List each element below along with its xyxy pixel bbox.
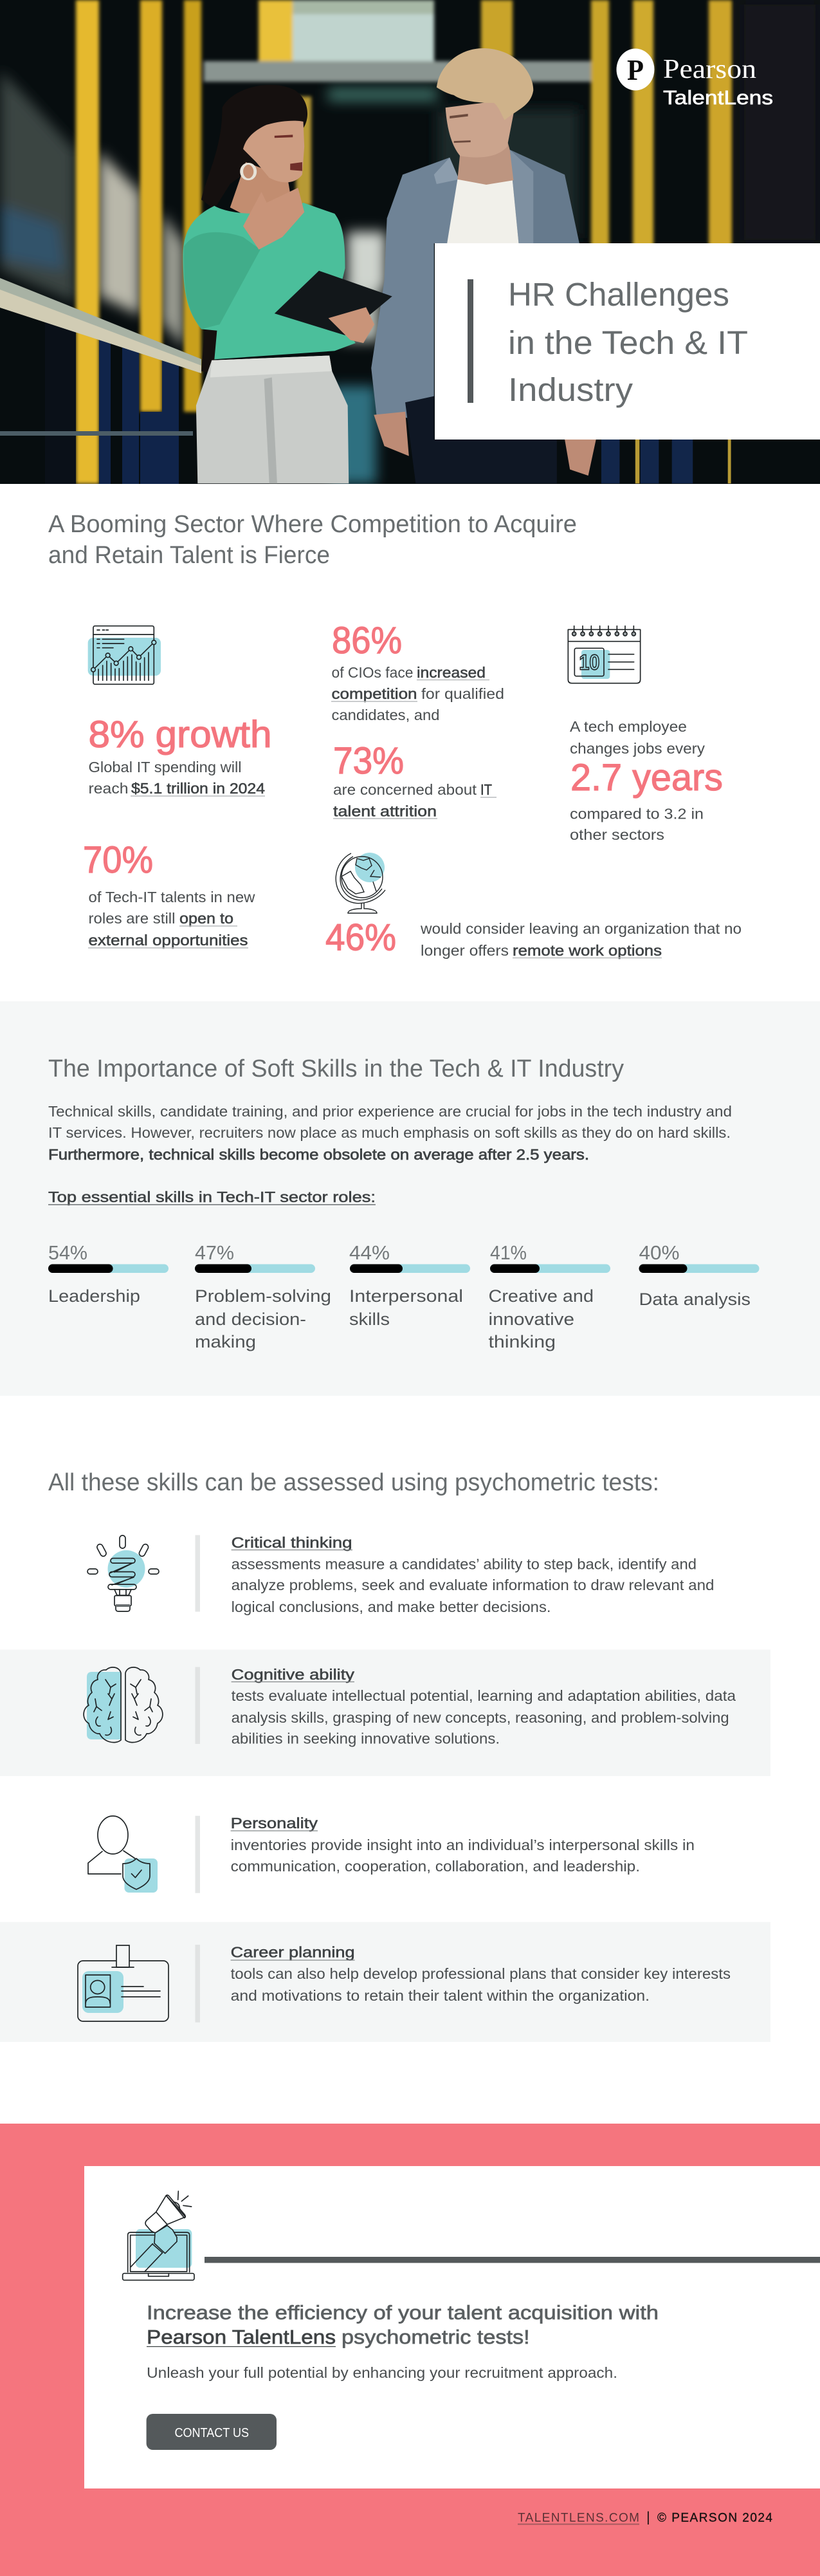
blazer bbox=[371, 158, 459, 418]
earring bbox=[242, 163, 255, 180]
heading: call to action: psychometric tests! bbox=[342, 2326, 530, 2348]
text: cognitive ability: tests evaluate intellectual potential, learning and adaptation abilities, data bbox=[232, 1687, 736, 1704]
stat: 70% of talents bbox=[83, 839, 255, 949]
logo: Pearson TalentLens: Pearson bbox=[663, 55, 756, 84]
stat: 86% of CIOs: 86% bbox=[332, 620, 402, 662]
divider bar bbox=[196, 1816, 200, 1893]
skill bar: problem-solving: 47% bbox=[195, 1241, 234, 1264]
stat: 70% of talents: open to bbox=[179, 910, 233, 927]
blazer right bbox=[510, 150, 579, 243]
text: critical thinking: Critical thinking bbox=[232, 1534, 352, 1551]
short blond hair bbox=[437, 48, 533, 120]
heading: call to action bbox=[147, 2301, 659, 2348]
logo: Pearson TalentLens bbox=[616, 49, 773, 109]
icon: calendar: 10 bbox=[579, 651, 599, 675]
stat: 2.7 years: A tech employee bbox=[570, 718, 687, 735]
row: critical thinking bbox=[87, 1534, 714, 1615]
stat: 70% of talents: 70% bbox=[83, 839, 153, 881]
row: career planning bbox=[0, 1922, 770, 2042]
row: cognitive ability bbox=[0, 1650, 770, 1776]
heading: psychometric tests: All these skills can be assessed using psychometric tests: bbox=[48, 1469, 659, 1496]
long hair bbox=[201, 329, 217, 372]
stat: 86% of CIOs: candidates, and bbox=[332, 707, 440, 723]
stat: 70% of talents: of Tech-IT talents in new bbox=[89, 889, 255, 905]
stat: 70% of talents: external opportunities bbox=[89, 932, 248, 949]
divider bar bbox=[196, 1667, 200, 1744]
text: personality: inventories provide insight into an individual’s interpersonal skills in bbox=[231, 1837, 695, 1853]
eyes and mouth bbox=[275, 134, 302, 171]
icon: growth chart bbox=[88, 626, 161, 684]
text: critical thinking: assessments measure a candidates’ ability to step back, identify and bbox=[232, 1556, 697, 1573]
footer: © PEARSON 2024 bbox=[657, 2511, 772, 2525]
stat: 2.7 years: changes jobs every bbox=[570, 740, 706, 757]
stat: 73% talent attrition: talent attrition bbox=[333, 803, 437, 820]
skill bar: creative thinking bbox=[489, 1241, 610, 1351]
waistband bbox=[210, 356, 332, 377]
skill bar: creative thinking: Creative and bbox=[489, 1286, 594, 1306]
heading: booming sector: and Retain Talent is Fierce bbox=[48, 542, 330, 569]
tablet bbox=[275, 271, 392, 335]
trouser crease bbox=[264, 377, 277, 483]
text: personality: Personality bbox=[231, 1815, 318, 1831]
icon: calendar bbox=[568, 626, 641, 683]
stat: 2.7 years: other sectors bbox=[570, 826, 664, 843]
stat: 73% talent attrition: 73% bbox=[333, 740, 404, 782]
heading: booming sector bbox=[48, 511, 577, 569]
text: critical thinking: logical conclusions, and make better decisions. bbox=[232, 1598, 551, 1615]
sweater bbox=[183, 203, 356, 359]
stat: 73% talent attrition: are concerned about bbox=[333, 781, 477, 798]
stat: 86% of CIOs: increased bbox=[417, 664, 486, 681]
skill bar: leadership: Leadership bbox=[48, 1286, 140, 1306]
button: contact us bbox=[147, 2414, 277, 2450]
divider bar bbox=[196, 1945, 200, 2023]
skill bar: interpersonal: Interpersonal bbox=[349, 1286, 463, 1306]
sleeve bbox=[184, 232, 260, 329]
skill bar: problem-solving: Problem-solving bbox=[195, 1286, 331, 1306]
stat: 46% remote work: would consider leaving an organization that no bbox=[420, 920, 742, 937]
face bbox=[446, 102, 515, 158]
text: cognitive ability: analysis skills, grasping of new concepts, reasoning, and problem-solving bbox=[232, 1709, 729, 1726]
stat: 86% of CIOs: for qualified bbox=[421, 685, 504, 702]
skill bar: creative thinking: thinking bbox=[489, 1332, 556, 1351]
thick rule bbox=[205, 2257, 820, 2263]
face bbox=[243, 121, 304, 182]
heading: soft skills: The Importance of Soft Skills in the Tech & IT Industry bbox=[48, 1055, 624, 1082]
heading: call to action: Pearson TalentLens bbox=[147, 2326, 336, 2348]
raised hand bbox=[243, 188, 304, 250]
skill bar: problem-solving: making bbox=[195, 1332, 256, 1351]
skill bar: creative thinking: 41% bbox=[490, 1241, 527, 1264]
footer: | bbox=[646, 2508, 650, 2525]
lapel left bbox=[434, 158, 459, 184]
title panel: Industry bbox=[508, 371, 633, 408]
hair of woman bbox=[201, 85, 307, 209]
text: cognitive ability: Cognitive ability bbox=[232, 1666, 355, 1683]
stat: 2.7 years: compared to 3.2 in bbox=[570, 806, 704, 822]
skill bar: interpersonal: skills bbox=[349, 1310, 390, 1329]
footer bbox=[518, 2508, 772, 2525]
skill bar: data analysis: Data analysis bbox=[639, 1290, 751, 1309]
icon: globe bbox=[336, 853, 385, 913]
heading: call to action: Increase the efficiency of your talent acquisition with bbox=[147, 2301, 659, 2324]
icon: person with shield bbox=[88, 1816, 158, 1893]
text: critical thinking bbox=[232, 1534, 715, 1615]
right hand bbox=[565, 439, 596, 476]
stat: 46% remote work bbox=[325, 916, 742, 959]
title panel: HR Challenges bbox=[508, 276, 729, 313]
stat: 73% talent attrition bbox=[333, 740, 497, 820]
paragraph: soft skills: IT services. However, recruiters now place as much emphasis on soft skills as they do on hard skills. bbox=[48, 1124, 731, 1141]
skill bar: leadership: 54% bbox=[48, 1241, 87, 1264]
icon: id badge bbox=[78, 1945, 169, 2021]
text: personality: communication, cooperation, collaboration, and leadership. bbox=[231, 1858, 640, 1875]
heading: booming sector: A Booming Sector Where Competition to Acquire bbox=[48, 511, 577, 538]
stat: 8% growth: Global IT spending will bbox=[89, 759, 242, 775]
stat: 8% growth: reach bbox=[89, 780, 129, 797]
title panel bbox=[435, 243, 820, 440]
railings right bbox=[601, 439, 731, 483]
text: career planning: Career planning bbox=[231, 1944, 355, 1961]
skill bar: problem-solving: and decision- bbox=[195, 1310, 306, 1329]
skill bar: creative thinking: innovative bbox=[489, 1310, 574, 1329]
logo: Pearson TalentLens: TalentLens bbox=[663, 86, 773, 109]
paragraph: soft skills bbox=[48, 1103, 732, 1163]
skill bar: interpersonal bbox=[349, 1241, 470, 1329]
skill bar: interpersonal: 44% bbox=[349, 1241, 390, 1264]
stat: 86% of CIOs bbox=[331, 620, 504, 723]
subheading: top skills: Top essential skills in Tech-IT sector roles: bbox=[48, 1189, 376, 1205]
title panel: in the Tech & IT bbox=[508, 324, 748, 361]
paragraph: soft skills: Furthermore, technical skills become obsolete on average after 2.5 years. bbox=[48, 1146, 589, 1163]
panel: call to action bbox=[84, 2166, 820, 2488]
text: career planning bbox=[231, 1944, 731, 2004]
stat: 86% of CIOs: competition bbox=[332, 685, 417, 702]
row: personality bbox=[88, 1815, 695, 1893]
stat: 8% growth: 8% growth bbox=[89, 714, 271, 755]
text: cognitive ability: abilities in seeking innovative solutions. bbox=[232, 1730, 500, 1747]
text: unleash: Unleash your full potential by enhancing your recruitment approach. bbox=[147, 2364, 617, 2381]
stat: 8% growth bbox=[89, 714, 271, 797]
stat: 46% remote work: longer offers bbox=[421, 942, 509, 959]
stat: 2.7 years: 2.7 years bbox=[570, 757, 723, 799]
skill bar: data analysis bbox=[639, 1241, 759, 1309]
lapel right bbox=[510, 150, 533, 243]
hand on tablet bbox=[329, 307, 374, 343]
logo: Pearson TalentLens: P bbox=[627, 53, 644, 86]
stat: 70% of talents: roles are still bbox=[89, 910, 175, 927]
button: contact us: CONTACT US bbox=[175, 2426, 249, 2440]
text: career planning: and motivations to retain their talent within the organization. bbox=[231, 1987, 650, 2004]
pants bbox=[196, 356, 349, 483]
left hand bbox=[374, 412, 409, 456]
eyes and mouth bbox=[450, 114, 471, 143]
icon: megaphone from laptop bbox=[123, 2191, 194, 2280]
neck bbox=[230, 162, 290, 214]
stat: 8% growth: $5.1 trillion in 2024 bbox=[131, 780, 265, 797]
divider bar bbox=[196, 1535, 200, 1611]
text: personality bbox=[231, 1815, 695, 1875]
footer: TALENTLENS.COM bbox=[518, 2511, 639, 2525]
neck bbox=[458, 143, 513, 185]
text: career planning: tools can also help develop professional plans that consider key interests bbox=[231, 1965, 731, 1982]
stat: 46% remote work: 46% bbox=[325, 916, 396, 959]
panel: call to action background bbox=[0, 2124, 820, 2576]
skill bar: data analysis: 40% bbox=[639, 1241, 679, 1264]
text: critical thinking: analyze problems, seek and evaluate information to draw relevant and bbox=[232, 1577, 715, 1593]
stat: 86% of CIOs: of CIOs face bbox=[332, 664, 413, 681]
shirt bbox=[447, 180, 518, 243]
hero photo bbox=[0, 0, 820, 484]
icon: light bulb bbox=[87, 1535, 159, 1611]
text: cognitive ability bbox=[232, 1666, 736, 1747]
paragraph: soft skills: Technical skills, candidate training, and prior experience are crucial for jobs in the tech industry and bbox=[48, 1103, 732, 1120]
dark trousers bbox=[405, 396, 557, 483]
stat: 46% remote work: remote work options bbox=[513, 942, 662, 959]
stat: 73% talent attrition: IT bbox=[480, 781, 492, 798]
stat: 2.7 years bbox=[570, 718, 723, 843]
skill bar: problem-solving bbox=[195, 1241, 331, 1351]
skill bar: leadership bbox=[48, 1241, 169, 1306]
panel: soft skills bbox=[0, 1001, 820, 1396]
icon: brain bbox=[84, 1667, 163, 1743]
